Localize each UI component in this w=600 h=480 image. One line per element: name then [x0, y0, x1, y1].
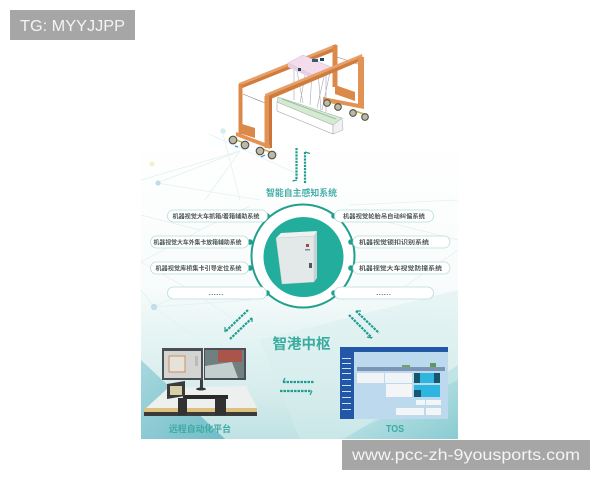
heading: 智港中枢: 智港中枢 [272, 335, 331, 353]
bogie wheels [229, 100, 368, 159]
watermark: top left [10, 10, 135, 40]
heading: 智能自主感知系统: 智能自主感知系统 [266, 187, 337, 198]
label: right 4: ...... [376, 291, 391, 297]
label: left 4: ...... [208, 291, 224, 297]
TOS software screenshot [340, 347, 448, 419]
watermark: bottom right: www.pcc-zh-9yousports.com [351, 447, 580, 464]
icon: gantry crane illustration [229, 44, 368, 159]
crane trolley [288, 55, 333, 79]
label: right 3: 机器视觉大车视觉防撞系统 [359, 264, 442, 272]
watermark: top left: TG: MYYJJPP [20, 18, 125, 35]
label: left 2: 机器视觉大车外集卡放箱辅助系统 [154, 238, 242, 246]
central ring with control cabinet [247, 204, 354, 308]
icon: control cabinet [276, 231, 317, 284]
label: left 3: 机器视觉库桥集卡引导定位系统 [156, 264, 242, 272]
desk [144, 386, 258, 410]
label: TOS: TOS [386, 424, 404, 435]
monitors [162, 348, 203, 380]
drive motors [235, 146, 265, 157]
label: right 2: 机器视觉锁扣识别系统 [359, 238, 429, 246]
front crane frame [236, 54, 364, 149]
bogie frames [231, 101, 367, 153]
far crane frame [238, 44, 358, 138]
arrows: crane to perception system [292, 148, 310, 183]
arrows: hub to remote platform [225, 310, 252, 339]
arrows: platform to TOS [280, 378, 314, 395]
label: left 1: 机器视觉大车抓箱/着箱辅助系统 [172, 212, 260, 220]
remote automation workstation [144, 348, 258, 416]
tablet [167, 381, 185, 399]
left system labels [150, 210, 268, 299]
arrows: hub to TOS [349, 311, 379, 338]
background panel [141, 128, 458, 439]
label: right 1: 机器视觉轮胎吊自动纠偏系统 [343, 212, 425, 220]
container stack under the crane [277, 97, 343, 134]
hoist cables [294, 66, 330, 112]
watermark: bottom right [342, 440, 590, 470]
label: 远程自动化平台: 远程自动化平台 [169, 423, 231, 434]
right system labels [334, 210, 450, 299]
